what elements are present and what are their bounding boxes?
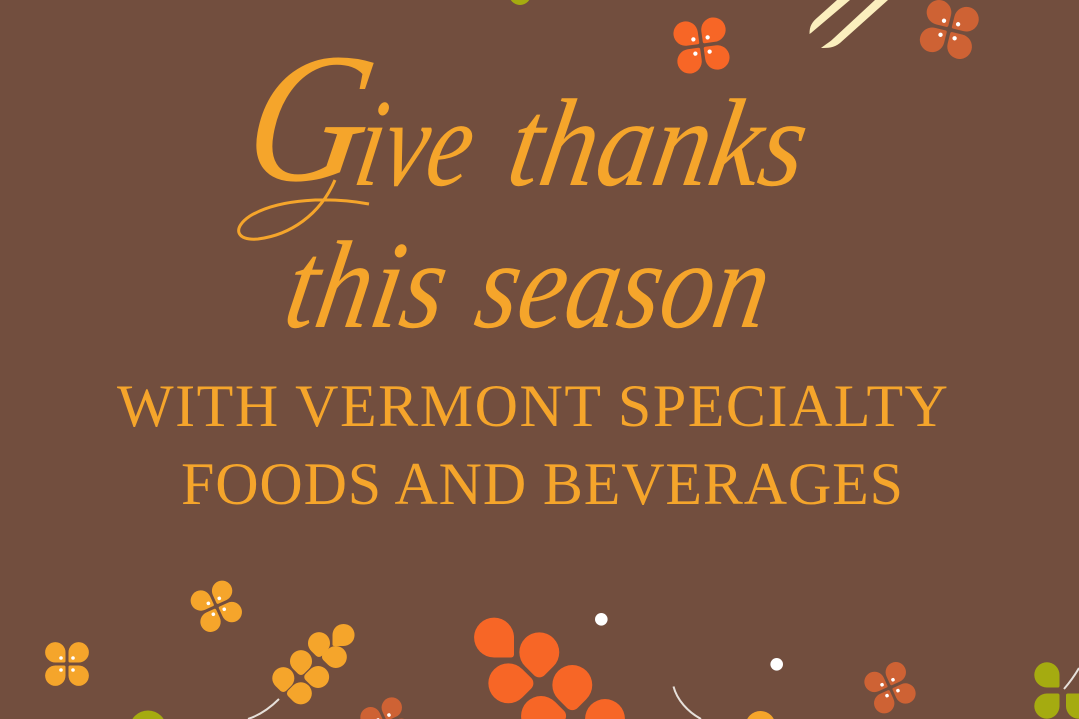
icon: green petal top (509, 0, 531, 5)
icon: yellow flower left (45, 642, 89, 686)
icon: rust flower bottom right (861, 659, 919, 717)
icon: green petal bottom left (130, 710, 166, 719)
icon: large orange sprig (474, 618, 633, 719)
title: Give thanks: G (233, 16, 389, 221)
icon: yellow flower tilted (187, 577, 245, 635)
icon: white dot right (770, 658, 783, 671)
icon: green clover right edge (1034, 662, 1079, 719)
decorative swash under title (239, 180, 369, 239)
title: this season (276, 217, 781, 355)
subtitle line 1: WITH VERMONT SPECIALTY (117, 373, 948, 439)
icon: rust flower bottom (357, 694, 415, 719)
title: Give thanks: thanks (499, 75, 818, 213)
icon: cream stripes (810, 0, 888, 48)
title: this season: season (467, 217, 781, 355)
subtitle line 2: FOODS AND BEVERAGES (181, 451, 903, 517)
title: this season: this (276, 217, 458, 355)
icon: white dot (595, 613, 608, 626)
icon: orange flower top (672, 16, 731, 75)
icon: yellow petal bottom (746, 711, 776, 719)
icon: yellow wheat sprig (248, 624, 355, 719)
title: Give thanks (233, 16, 818, 221)
icon: white curved stem (674, 686, 701, 719)
icon: rust flower top right (917, 0, 981, 62)
title: Give thanks: ive (346, 75, 485, 213)
